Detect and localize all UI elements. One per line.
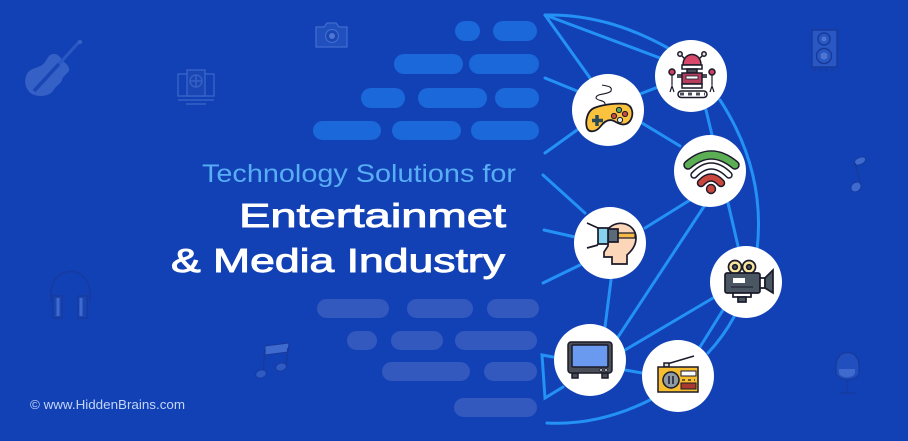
icon: faint speaker bbox=[812, 30, 837, 70]
icon: faint media device with globe bbox=[178, 70, 214, 104]
circle: movie camera bbox=[710, 246, 782, 318]
icon: faint camera bbox=[316, 23, 347, 47]
icon: vr headset bbox=[587, 223, 636, 264]
icon: robot bbox=[669, 52, 715, 98]
icon: wifi signal bbox=[688, 155, 735, 194]
circle: wifi bbox=[674, 135, 746, 207]
icon: faint microphone bbox=[836, 352, 859, 393]
icon: faint double music note bbox=[255, 343, 289, 379]
subtitle: Technology Solutions for bbox=[202, 160, 516, 188]
circle: robot bbox=[655, 40, 727, 112]
icon: radio bbox=[658, 356, 698, 392]
circle: television bbox=[554, 324, 626, 396]
heading line one: Entertainmet bbox=[239, 197, 506, 234]
network connector lines bbox=[542, 15, 759, 423]
heading line two: & Media Industry bbox=[171, 242, 506, 279]
copyright footer: © www.HiddenBrains.com bbox=[30, 397, 185, 412]
icon: faint violin bbox=[25, 40, 82, 96]
bottom muted pill stack bbox=[317, 299, 539, 417]
icon: faint single music note bbox=[849, 155, 867, 194]
icon: faint headphones bbox=[51, 272, 90, 318]
top blue pill stack bbox=[313, 21, 539, 140]
icon: movie camera bbox=[725, 260, 773, 302]
icon: television bbox=[568, 342, 612, 378]
circle: radio bbox=[642, 340, 714, 412]
icon: gamepad bbox=[586, 85, 632, 131]
circle: vr headset bbox=[574, 207, 646, 279]
circle: gamepad bbox=[572, 74, 644, 146]
